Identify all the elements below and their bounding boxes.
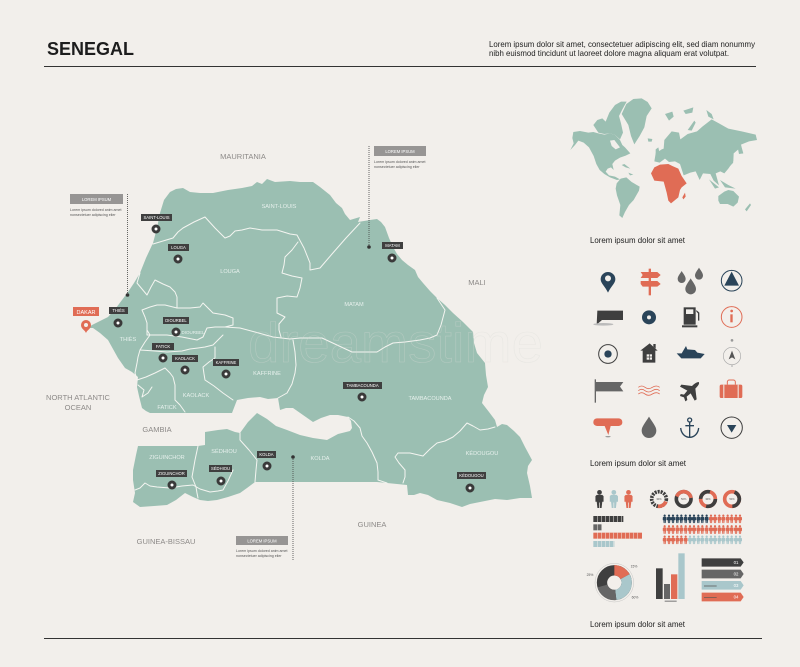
map of Senegal <box>73 179 543 507</box>
donut charts <box>650 490 741 508</box>
numbered arrows: 01 <box>734 560 739 565</box>
region name labels: ZIGUINCHOR <box>149 455 185 461</box>
icon: waving flag on pole <box>595 379 623 403</box>
pie chart <box>587 563 638 602</box>
Eurasia <box>654 119 757 185</box>
icon: water drops <box>678 268 703 294</box>
South America <box>616 177 640 218</box>
gender figures <box>595 490 633 508</box>
donut charts: 50% <box>729 497 735 501</box>
icon: anchor <box>681 418 699 437</box>
callout: bottom <box>236 455 295 560</box>
city markers and tags: MATAM <box>385 243 400 248</box>
population pictogram <box>663 514 742 544</box>
icon: suitcase <box>720 380 742 398</box>
neighbouring country labels: MAURITANIA <box>220 152 266 161</box>
capital marker: Dakar: DAKAR <box>77 310 96 316</box>
city markers and tags: DIOURBEL <box>165 318 187 323</box>
region name labels: THIÈS <box>120 336 136 343</box>
neighbouring country labels: GUINEA <box>358 520 386 529</box>
header description: Lorem ipsum dolor sit amet, consectetuer adipiscing elit, sed diam nonummy <box>489 39 756 49</box>
city markers and tags: KOLDA <box>259 452 274 457</box>
neighbouring country labels: OCEAN <box>65 403 91 412</box>
islands <box>622 107 751 211</box>
watermark: dreamstime <box>248 311 543 374</box>
region name labels: KÉDOUGOU <box>466 450 498 457</box>
region name labels: KOLDA <box>311 456 330 462</box>
city markers and tags: LOUGA <box>171 245 186 250</box>
icon: info <box>721 307 742 327</box>
pie chart: 25% <box>587 573 593 577</box>
city markers and tags: KAFFRINE <box>216 360 237 365</box>
neighbouring country labels: GUINEA-BISSAU <box>137 537 195 546</box>
region name labels: MATAM <box>344 302 364 308</box>
callout: top <box>367 146 426 249</box>
neighbouring country labels <box>46 152 486 546</box>
callout: left: nonsectetuer adipiscing elier <box>70 213 116 217</box>
numbered arrows <box>702 558 744 601</box>
pie chart: 15% <box>631 564 637 568</box>
capital marker: Dakar <box>73 307 99 333</box>
Africa highlighted <box>651 164 687 203</box>
city markers and tags <box>109 214 486 491</box>
callout: left: LOREM IPSUM <box>82 197 112 202</box>
callout: bottom: Lorem ipsum dolored anim amet <box>236 549 288 553</box>
numbered arrows: 02 <box>734 572 739 577</box>
pie chart: 60% <box>632 596 638 600</box>
donut charts: 30% <box>705 497 711 501</box>
header description: nibh euismod tincidunt ut laoreet dolore magna aliquam erat volutpat. <box>489 48 729 58</box>
city markers and tags: THIÈS <box>112 308 125 313</box>
city markers and tags: KAOLACK <box>175 356 195 361</box>
map landmass <box>88 179 532 507</box>
horizontal stacked bars <box>593 516 642 547</box>
city markers and tags: KÉDOUGOU <box>459 473 484 478</box>
icon: banner flag <box>593 311 623 326</box>
region name labels: KAFFRINE <box>253 371 281 377</box>
region name labels: KAOLACK <box>183 393 209 399</box>
infographic charts <box>587 490 744 602</box>
region name labels <box>120 204 498 462</box>
icon grid <box>593 268 742 438</box>
caption: icons: Lorem ipsum dolor sit amet <box>590 458 687 468</box>
city markers and tags: ZIGUINCHOR <box>158 471 185 476</box>
icon: target <box>599 345 617 363</box>
Canadian arctic islands <box>593 102 627 139</box>
world map <box>570 98 757 218</box>
icon: fuel pump <box>682 307 699 327</box>
icon: disc <box>642 310 656 324</box>
icon: sign pin <box>593 418 622 437</box>
city markers and tags: SAINT-LOUIS <box>143 215 170 220</box>
icon: warning triangle <box>721 270 742 291</box>
donut charts: 50% <box>681 497 687 501</box>
region name labels: TAMBACOUNDA <box>408 396 452 402</box>
numbered arrows: 03 <box>734 583 739 588</box>
caption: world map: Lorem ipsum dolor sit amet <box>590 235 686 245</box>
numbered arrows: 04 <box>734 595 739 600</box>
callout: left <box>70 194 129 297</box>
callout: top: nonsectetuer adipiscing elier <box>374 165 420 169</box>
bar chart <box>656 553 685 602</box>
region name labels: FATICK <box>157 405 177 411</box>
icon: drop <box>642 417 656 438</box>
callout: bottom: LOREM IPSUM <box>247 538 277 544</box>
icon: ship <box>677 346 705 358</box>
neighbouring country labels: NORTH ATLANTIC <box>46 393 111 402</box>
title: SENEGAL <box>47 38 134 59</box>
icon: map pin <box>601 272 615 293</box>
region name labels: DIOURBEL <box>181 330 205 335</box>
region name labels: LOUGA <box>220 269 240 275</box>
North America <box>570 131 630 180</box>
icon: down arrow <box>721 417 742 438</box>
callout: left: Lorem ipsum dolored anim amet <box>70 208 122 212</box>
neighbouring country labels: GAMBIA <box>142 425 172 434</box>
icon: compass <box>723 339 741 367</box>
header description <box>489 39 756 58</box>
callout: top: LOREM IPSUM <box>385 149 415 154</box>
icon: airplane <box>680 382 699 401</box>
neighbouring country labels: MALI <box>468 278 486 287</box>
icon: signpost <box>641 269 661 295</box>
city markers and tags: TAMBACOUNDA <box>346 383 379 388</box>
callout: bottom: nonsectetuer adipiscing elier <box>236 554 282 558</box>
Australia <box>718 190 739 207</box>
icon: house <box>640 343 658 363</box>
icon: waves <box>638 386 660 395</box>
region name labels: SÉDHIOU <box>211 448 237 455</box>
Greenland <box>622 98 652 144</box>
caption: charts: Lorem ipsum dolor sit amet <box>590 619 686 629</box>
city markers and tags: FATICK <box>156 344 170 349</box>
donut charts: 30% <box>656 497 662 501</box>
region name labels: SAINT-LOUIS <box>262 204 297 210</box>
city markers and tags: SÉDHIOU <box>211 466 230 471</box>
region borders <box>135 217 495 498</box>
callout: top: Lorem ipsum dolored anim amet <box>374 160 426 164</box>
